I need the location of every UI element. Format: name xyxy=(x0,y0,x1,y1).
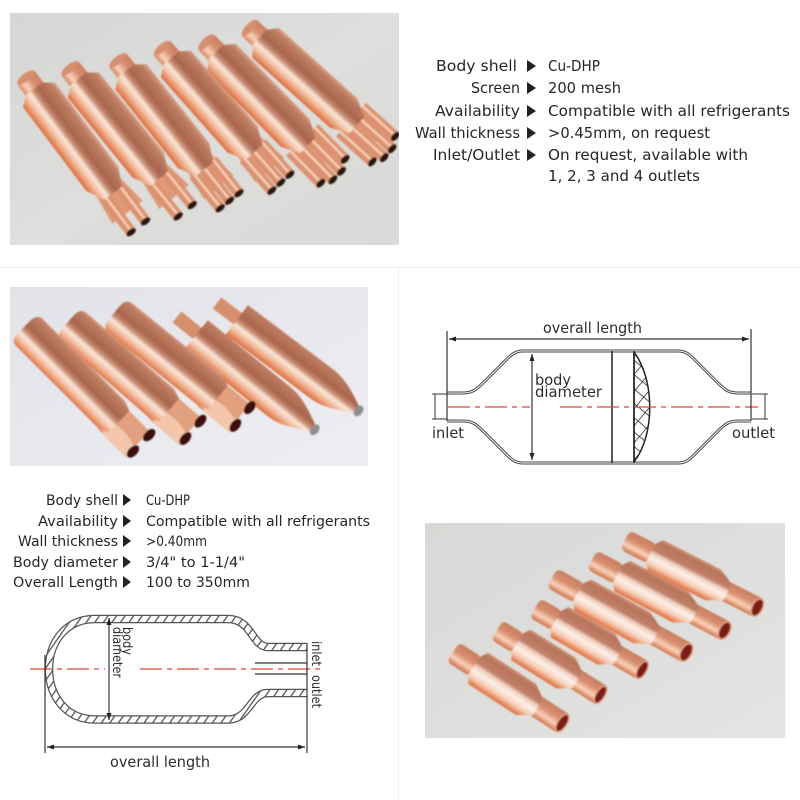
drier outline with screen xyxy=(447,351,751,463)
dimension: body diameter: diameter xyxy=(535,383,603,401)
label: inlet: inlet xyxy=(308,641,323,666)
spec row: overall length: Overall Length xyxy=(13,575,118,591)
spec row: wall thickness: Wall thickness xyxy=(18,534,118,550)
drier tube 2 xyxy=(60,60,198,222)
spec row: screen: Screen xyxy=(471,79,520,97)
spec row: body shell: Cu-DHP xyxy=(548,57,600,75)
center line xyxy=(448,406,758,408)
dimension: overall length xyxy=(447,319,751,421)
dimension: outlet xyxy=(732,394,775,442)
drier tube 3 xyxy=(108,52,244,214)
spec row: body diameter: Body diameter xyxy=(13,555,118,571)
spec row: body diameter: 3/4" to 1-1/4" xyxy=(146,555,245,571)
drier tube 2 xyxy=(55,307,209,448)
spec row: inlet and outlet xyxy=(433,146,748,185)
drier tube 1 xyxy=(16,70,152,238)
spec row: availability: Availability xyxy=(435,102,520,120)
spec row: inlet and outlet: On request, available with xyxy=(548,146,748,164)
spec list: dome-end drier xyxy=(13,493,370,591)
drier tube 5 xyxy=(588,552,732,641)
dimension: inlet xyxy=(432,394,464,442)
label: outlet: outlet xyxy=(308,675,323,708)
center line xyxy=(30,668,323,670)
drier tube 3 xyxy=(101,298,258,435)
drier tube 3 xyxy=(530,599,650,680)
spec row: inlet and outlet: Inlet/Outlet xyxy=(433,146,520,164)
spec row: wall thickness: >0.45mm, on request xyxy=(548,124,710,142)
spec row: wall thickness xyxy=(18,534,207,550)
spec row: wall thickness xyxy=(415,124,710,142)
drier tube 4 xyxy=(153,40,296,196)
dimension: overall length: overall length xyxy=(110,753,210,771)
diagram: inline drier cross-section xyxy=(432,319,775,463)
drier tube 1 xyxy=(10,313,158,461)
drier tube 6 xyxy=(240,19,399,168)
dimension: inlet: inlet xyxy=(432,424,464,442)
dimension: body diameter xyxy=(106,618,134,720)
dimension: outlet: outlet xyxy=(732,424,775,442)
drier tube 1 xyxy=(448,643,570,734)
diagram: dome-end drier cross-section xyxy=(30,618,323,771)
dimension: body diameter xyxy=(530,354,603,460)
spec row: availability: Availability xyxy=(38,514,118,530)
spec row: body shell xyxy=(46,493,190,509)
spec row: availability: Compatible with all refrigerants xyxy=(146,514,370,530)
drier tube 2 xyxy=(492,621,608,705)
spec row: wall thickness: >0.40mm xyxy=(146,534,207,550)
spec row: availability: Compatible with all refrigerants xyxy=(548,102,790,120)
drier tube 4 xyxy=(172,311,320,436)
dimension: body diameter: body xyxy=(535,371,571,389)
spec row: body shell: Cu-DHP xyxy=(146,493,190,509)
spec row: screen: 200 mesh xyxy=(548,79,621,97)
dimension: overall length xyxy=(45,643,307,771)
spec row: screen xyxy=(471,79,621,97)
spec row: inlet and outlet: 1, 2, 3 and 4 outlets xyxy=(548,167,700,185)
photo: inline copper driers xyxy=(425,523,785,741)
spec row: availability xyxy=(38,514,370,530)
section dividers xyxy=(0,267,800,800)
drier tube 5 xyxy=(197,34,350,189)
drier tube 5 xyxy=(212,296,364,417)
spec list: multi-outlet drier xyxy=(415,57,790,185)
drier tube 4 xyxy=(548,570,694,663)
dimension: body diameter: diameter xyxy=(109,627,124,679)
photo: copper driers with closed dome ends xyxy=(10,287,373,466)
spec row: body shell: Body shell xyxy=(46,493,118,509)
dimension: overall length: overall length xyxy=(543,319,642,337)
drier tube 6 xyxy=(621,531,765,618)
spec row: overall length xyxy=(13,575,250,591)
spec row: body shell xyxy=(436,57,600,75)
spec row: wall thickness: Wall thickness xyxy=(415,124,520,142)
hatched wall xyxy=(49,619,307,720)
photo: copper driers with multiple outlets xyxy=(7,9,405,245)
spec row: body shell: Body shell xyxy=(436,57,517,75)
spec row: availability xyxy=(435,102,790,120)
dimension: body diameter: body xyxy=(119,627,134,655)
spec row: overall length: 100 to 350mm xyxy=(146,575,250,591)
spec row: body diameter xyxy=(13,555,245,571)
